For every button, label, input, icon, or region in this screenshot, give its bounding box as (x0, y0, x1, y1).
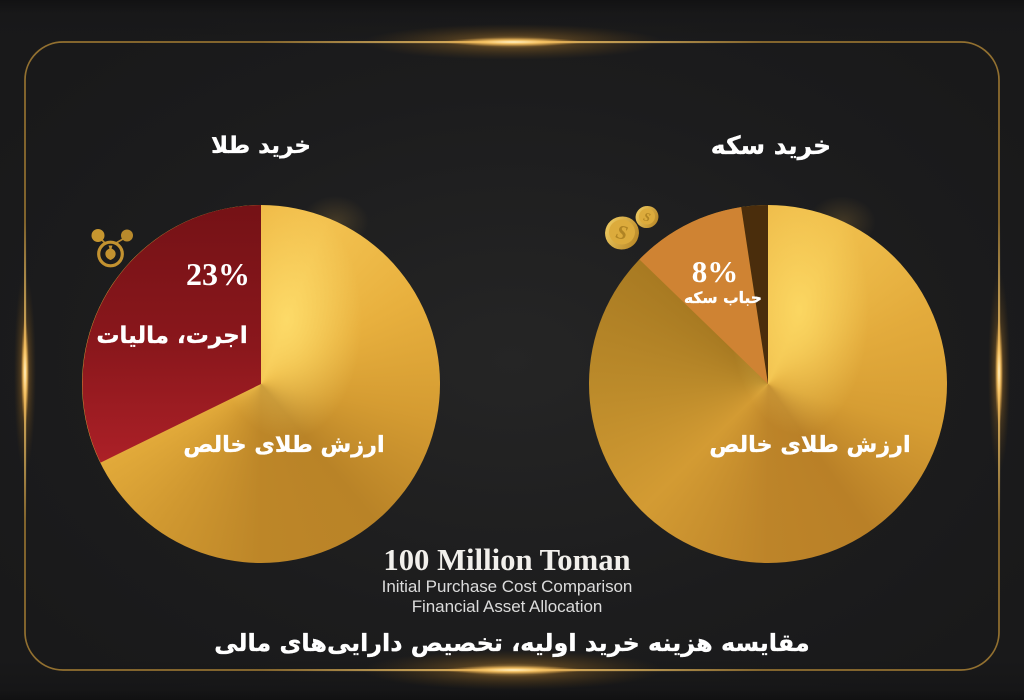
icon: gold coins: S (642, 209, 652, 225)
slice: fees and taxes (82, 205, 261, 463)
icon: gold coins (605, 206, 658, 250)
main title: persian: مقایسه هزینه خرید اولیه، تخصیص دارایی‌های مالی (214, 629, 810, 657)
heading: gold purchase: خرید طلا (211, 133, 311, 159)
label: pure gold value, left pie: ارزش طلای خالص (183, 432, 385, 458)
pie chart: gold purchase (82, 205, 440, 563)
subtitle: english: Financial Asset Allocation (412, 597, 602, 616)
slice: dark segment (741, 205, 768, 384)
icon: gold coins: S (614, 221, 630, 245)
value: 23 percent: 23% (186, 256, 250, 292)
label: coin bubble: حباب سکه (684, 289, 762, 307)
slice: coin bubble (639, 207, 768, 384)
subtitle: english (382, 577, 632, 616)
icon: medal with coins (92, 229, 133, 268)
amount title: 100 Million Toman (383, 543, 631, 577)
label: fees and taxes: اجرت، مالیات (96, 323, 248, 349)
value: 8 percent: 8% (692, 254, 738, 289)
pie chart: coin purchase (589, 205, 947, 563)
heading: coin purchase: خرید سکه (711, 131, 831, 160)
subtitle: english: Initial Purchase Cost Comparison (382, 577, 632, 596)
label: pure gold value, right pie: ارزش طلای خالص (709, 432, 911, 458)
